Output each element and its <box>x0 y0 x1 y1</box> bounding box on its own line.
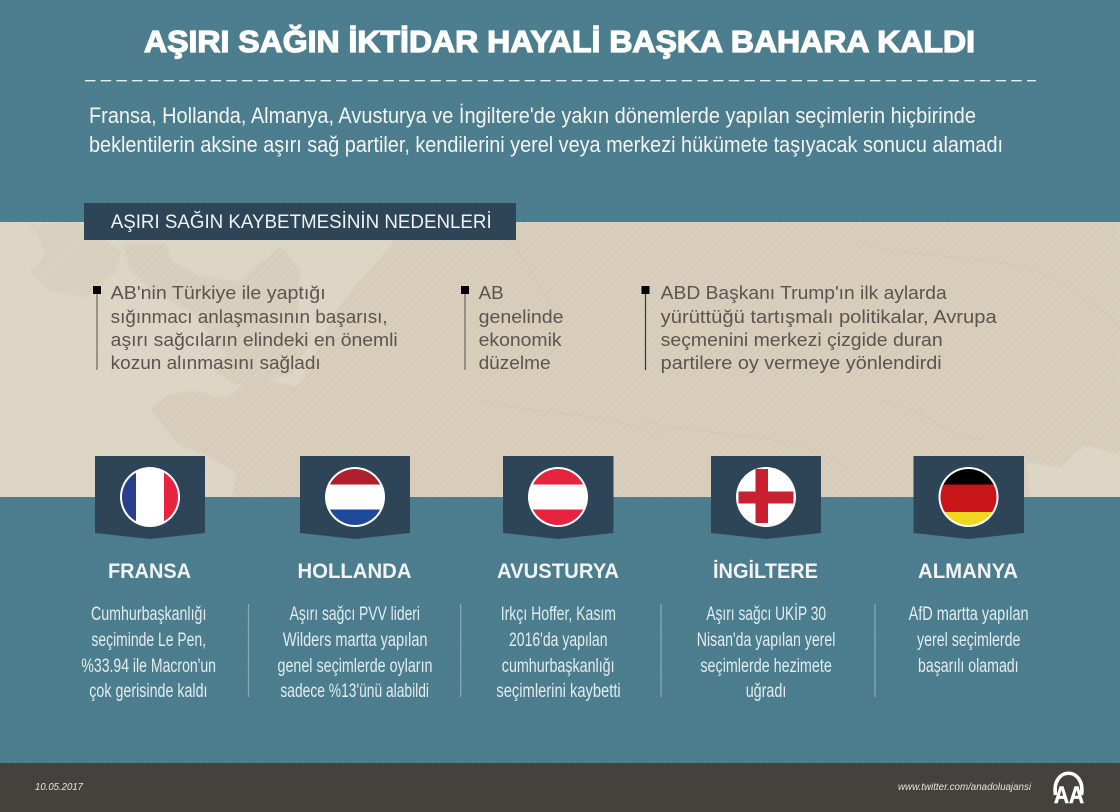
country: Fransa: seçiminde Le Pen, <box>91 630 206 651</box>
country: İngiltere: Aşırı sağcı UKİP 30 <box>706 604 826 625</box>
icon: Germany flag banner <box>914 456 1024 539</box>
icon: Austria flag banner <box>503 456 614 539</box>
country: Almanya: yerel seçimlerde <box>917 630 1020 651</box>
icon: France flag banner <box>95 456 205 539</box>
country: İngiltere: Nisan'da yapılan yerel <box>697 630 835 651</box>
reason 1 <box>93 282 398 373</box>
reason 2: genelinde <box>479 306 564 327</box>
icon: Anadolu Agency logo <box>1054 773 1084 809</box>
country: Avusturya: AVUSTURYA <box>497 560 619 583</box>
country: Fransa: Cumhurbaşkanlığı <box>91 604 206 625</box>
country: Hollanda <box>278 560 432 702</box>
source url: www.twitter.com/anadoluajansi <box>898 781 1032 793</box>
country: Avusturya: Irkçı Hoffer, Kasım <box>501 604 616 625</box>
heading: reasons: AŞIRI SAĞIN KAYBETMESİNİN NEDENLERİ <box>111 211 492 233</box>
country: Almanya: AfD martta yapılan <box>909 604 1029 625</box>
country: Almanya: ALMANYA <box>918 560 1018 583</box>
reason 3: yürüttüğü tartışmalı politikalar, Avrupa <box>661 306 997 327</box>
date: 10.05.2017 <box>35 781 84 793</box>
reason 3 <box>642 282 997 373</box>
reason 1: aşırı sağcıların elindeki en önemli <box>111 329 398 350</box>
country: Avusturya: cumhurbaşkanlığı <box>502 656 615 677</box>
heading: reasons <box>84 203 516 240</box>
country: Avusturya <box>496 560 621 702</box>
country: Almanya: başarılı olamadı <box>918 656 1019 677</box>
reason 2: ekonomik <box>479 329 562 350</box>
reason 3: partilere oy vermeye yönlendirdi <box>661 352 942 373</box>
reason 2 <box>461 282 564 373</box>
country: Hollanda: sadece %13'ünü alabildi <box>280 681 429 702</box>
intro text: Fransa, Hollanda, Almanya, Avusturya ve İngiltere'de yakın dönemlerde yapılan seçimlerin hiçbirinde <box>89 103 976 128</box>
country: İngiltere: seçimlerde hezimete <box>700 656 832 677</box>
title: AŞIRI SAĞIN İKTİDAR HAYALİ BAŞKA BAHARA KALDI <box>144 24 975 59</box>
country: Fransa <box>81 560 216 702</box>
country: Hollanda: genel seçimlerde oyların <box>278 656 432 677</box>
country: Avusturya: 2016'da yapılan <box>509 630 608 651</box>
country: İngiltere <box>697 560 835 702</box>
country: Hollanda: Aşırı sağcı PVV lideri <box>290 604 420 625</box>
country: Hollanda: Wilders martta yapılan <box>283 630 428 651</box>
country: Fransa: %33.94 ile Macron'un <box>81 656 216 677</box>
background: beige map band <box>0 222 1120 497</box>
country: Fransa: çok gerisinde kaldı <box>89 681 208 702</box>
icon: England flag banner <box>711 456 821 539</box>
intro text <box>89 103 1003 157</box>
reason 3: ABD Başkanı Trump'ın ilk aylarda <box>661 282 947 303</box>
reason 3: seçmenini merkezi çizgide duran <box>661 329 943 350</box>
dashed divider <box>85 80 1036 82</box>
footer bar <box>0 763 1120 812</box>
country: Hollanda: HOLLANDA <box>298 560 412 583</box>
reason 2: AB <box>479 282 504 303</box>
intro text: beklentilerin aksine aşırı sağ partiler, kendilerini yerel veya merkezi hükümete taşıyacak sonucu alamadı <box>89 132 1003 157</box>
reason 1: kozun alınmasını sağladı <box>111 352 321 373</box>
country: Avusturya: seçimlerini kaybetti <box>496 681 621 702</box>
country: Fransa: FRANSA <box>108 560 191 583</box>
country: İngiltere: İNGİLTERE <box>713 560 818 583</box>
icon: Anadolu Agency logo: AA <box>1054 782 1084 809</box>
reason 1: sığınmacı anlaşmasının başarısı, <box>111 306 388 327</box>
icon: Netherlands flag banner <box>300 456 410 539</box>
country: İngiltere: uğradı <box>746 681 786 702</box>
reason 1: AB'nin Türkiye ile yaptığı <box>111 282 326 303</box>
reason 2: düzelme <box>479 352 551 373</box>
country: Almanya <box>909 560 1029 677</box>
